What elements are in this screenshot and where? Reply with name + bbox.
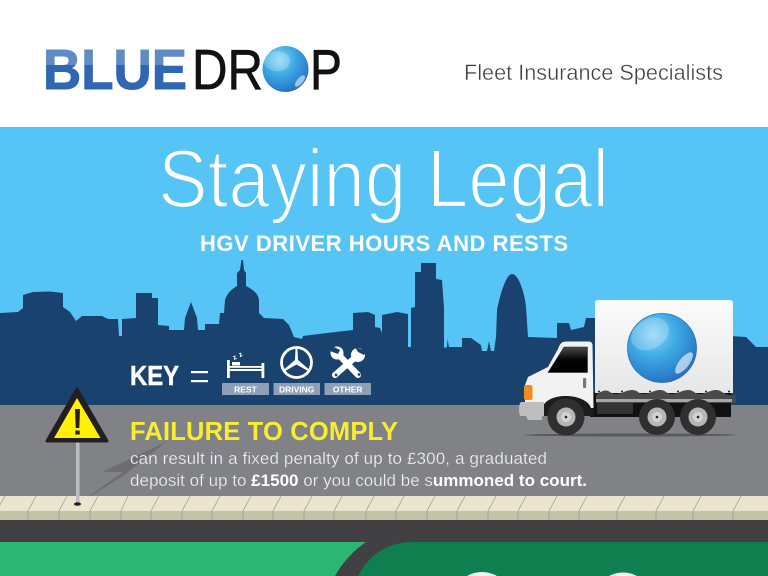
label: driving: DRIVING <box>279 385 315 395</box>
icon circle left <box>467 572 497 576</box>
cab window <box>548 347 588 372</box>
icon circle right <box>609 573 637 576</box>
tagline: Fleet Insurance Specialists <box>464 60 723 85</box>
truck <box>519 300 736 436</box>
label: other: OTHER <box>333 385 363 395</box>
exclamation mark <box>75 409 80 434</box>
label: rest: REST <box>234 385 258 395</box>
logo: Bluedrop: BLUE <box>43 38 187 102</box>
city skyline <box>0 260 768 405</box>
road background <box>0 405 768 496</box>
wheel arch <box>544 394 594 416</box>
icon: bed: z z <box>232 351 244 362</box>
sky background <box>0 127 768 405</box>
kerb <box>0 496 768 520</box>
equals sign <box>191 371 208 382</box>
penalty text: can result in a fixed penalty of up to £300, a graduated <box>130 449 547 468</box>
logo: Bluedrop: P <box>310 38 342 102</box>
bumper <box>519 402 544 420</box>
sign pole <box>76 440 80 503</box>
icon: tools <box>330 346 367 376</box>
icon: bed <box>227 351 264 378</box>
cargo box <box>595 300 736 403</box>
logo: Bluedrop: BLUE <box>43 38 187 102</box>
key label: KEY <box>130 360 179 391</box>
title: Staying Legal <box>158 132 609 225</box>
logo ball on truck <box>625 311 696 382</box>
logo: Bluedrop: DR <box>192 38 263 102</box>
door handle <box>583 378 586 388</box>
sign shadow <box>78 442 166 504</box>
dark green panel <box>358 542 768 576</box>
label: rest <box>222 383 269 395</box>
icon: steering wheel <box>282 348 312 378</box>
penalty text <box>130 449 587 490</box>
sign triangle <box>47 389 107 441</box>
truck shadow <box>524 434 736 436</box>
warning sign <box>47 389 107 506</box>
green panel <box>0 542 768 576</box>
dark road band <box>0 520 768 542</box>
penalty text: deposit of up to £1500 or you could be summoned to court. <box>130 471 587 490</box>
logo: Bluedrop <box>46 46 340 92</box>
headlight <box>524 385 532 400</box>
label: other <box>324 383 371 395</box>
cab <box>525 342 594 408</box>
road bend <box>335 542 768 576</box>
failure heading: FAILURE TO COMPLY <box>130 418 398 446</box>
subtitle: HGV DRIVER HOURS AND RESTS <box>200 231 568 256</box>
chassis <box>590 392 731 417</box>
wheels <box>548 398 716 436</box>
header background <box>0 0 768 127</box>
label: driving <box>274 383 320 395</box>
key legend <box>130 346 371 395</box>
